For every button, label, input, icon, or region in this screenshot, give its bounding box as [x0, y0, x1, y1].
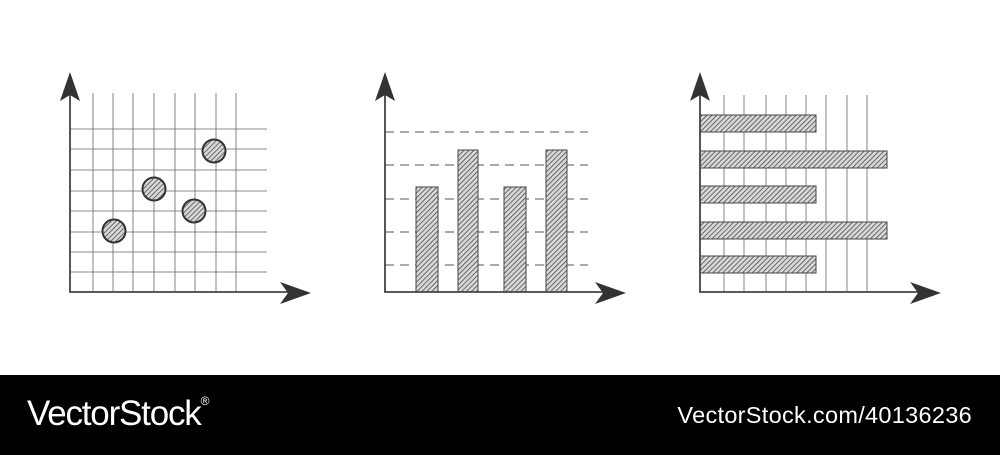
panel: scatter chart: [60, 72, 311, 304]
footer logo text: VectorStock®: [27, 394, 208, 433]
scatter points: [102, 140, 226, 242]
footer url text: VectorStock.com/40136236: [677, 402, 972, 428]
panel: bar chart: [375, 72, 626, 304]
footer bar: [0, 375, 1000, 455]
panel: horizontal bar chart: [690, 72, 941, 304]
